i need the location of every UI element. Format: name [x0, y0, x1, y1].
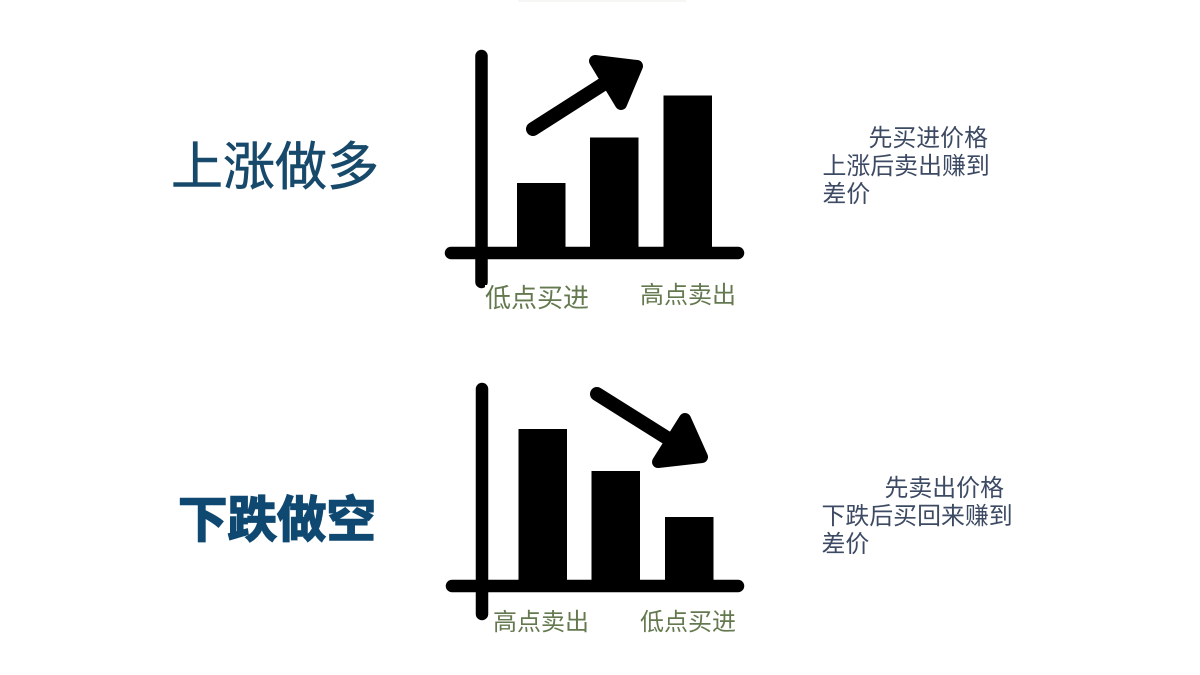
- text: short description: 先卖出价格: [884, 475, 1004, 502]
- label: sell high (falling): 高点卖出: [493, 609, 589, 636]
- label: buy low (rising): 低点买进: [485, 283, 589, 313]
- text: long description: 上涨后卖出赚到: [822, 153, 990, 180]
- text: short description: 差价: [822, 531, 869, 558]
- heading: short position: 下跌做空: [178, 493, 376, 548]
- falling chart axes: [452, 389, 738, 614]
- text: long description: 先买进价格: [868, 125, 988, 152]
- chart: falling bars: [452, 389, 738, 614]
- rising chart bars: [517, 96, 712, 254]
- label: buy low (falling): 低点买进: [640, 609, 736, 636]
- faint top strip: [518, 0, 686, 2]
- rising arrow: [533, 61, 637, 129]
- falling chart bars: [518, 429, 714, 586]
- falling arrow: [597, 394, 702, 462]
- rising chart axes: [451, 56, 738, 282]
- text: long description: [822, 125, 990, 208]
- label: sell high (rising): 高点卖出: [640, 282, 736, 309]
- text: long description: 差价: [822, 181, 870, 208]
- heading: long position: 上涨做多: [171, 139, 379, 197]
- text: short description: [822, 475, 1013, 558]
- chart: rising bars: [451, 56, 738, 282]
- text: short description: 下跌后买回来赚到: [822, 503, 1013, 530]
